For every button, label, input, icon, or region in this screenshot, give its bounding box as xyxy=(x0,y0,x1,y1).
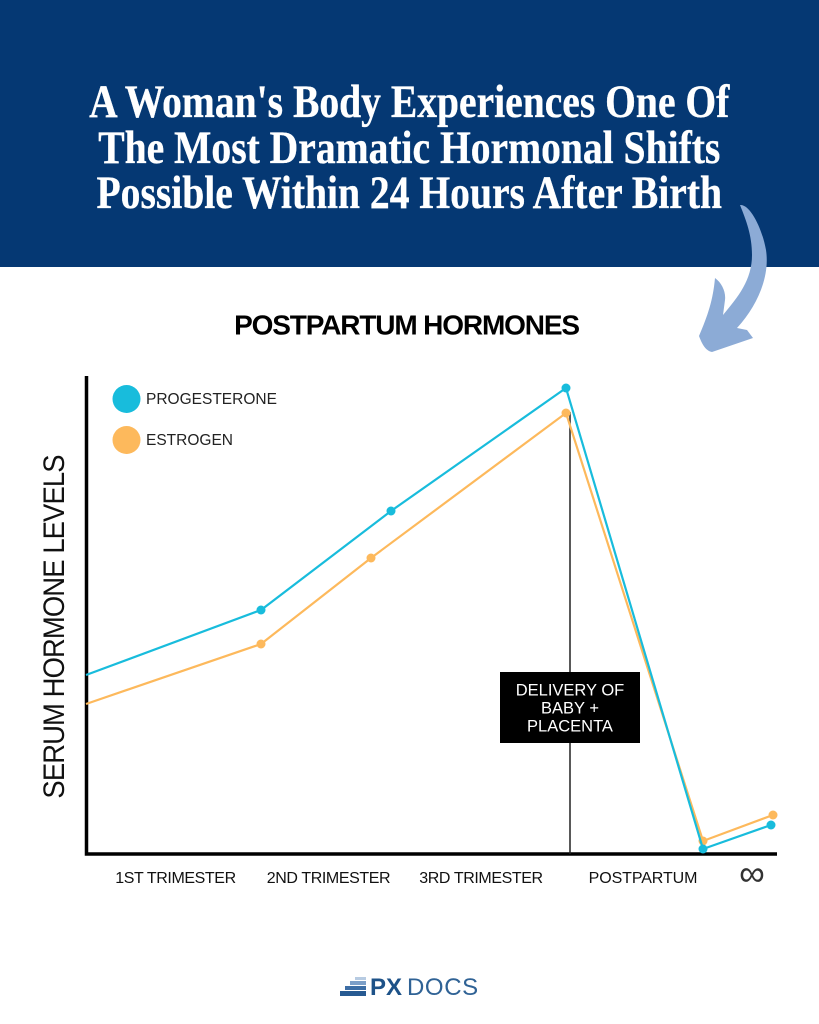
estrogen series xyxy=(86,408,778,846)
y axis label: SERUM HORMONE LEVELS xyxy=(38,455,71,799)
x axis labels: ∞ xyxy=(739,852,765,894)
chart heading: POSTPARTUM HORMONES xyxy=(234,310,579,340)
arrow icon xyxy=(699,205,767,352)
chart axes xyxy=(86,376,777,854)
x axis labels: 3RD TRIMESTER xyxy=(419,870,543,887)
title: Possible Within 24 Hours After Birth xyxy=(96,167,722,219)
legend xyxy=(112,385,277,454)
header band xyxy=(0,0,819,267)
progesterone series xyxy=(86,384,776,854)
legend: ESTROGEN xyxy=(146,432,233,449)
x axis labels: 1ST TRIMESTER xyxy=(115,870,236,887)
logo: DOCS xyxy=(407,974,479,1001)
callout: delivery: PLACENTA xyxy=(527,718,613,736)
x axis labels: POSTPARTUM xyxy=(589,870,697,887)
title: The Most Dramatic Hormonal Shifts xyxy=(98,122,720,174)
title: A Woman's Body Experiences One Of xyxy=(89,76,729,128)
callout: delivery: BABY + xyxy=(541,700,599,718)
callout: delivery: DELIVERY OF xyxy=(516,682,624,700)
x axis labels xyxy=(115,852,765,894)
title xyxy=(89,76,730,219)
delivery line xyxy=(569,412,571,854)
logo: PX xyxy=(370,974,402,1001)
legend: PROGESTERONE xyxy=(146,391,277,408)
x axis labels: 2ND TRIMESTER xyxy=(267,870,390,887)
logo xyxy=(340,974,479,1001)
callout: delivery xyxy=(500,672,640,743)
